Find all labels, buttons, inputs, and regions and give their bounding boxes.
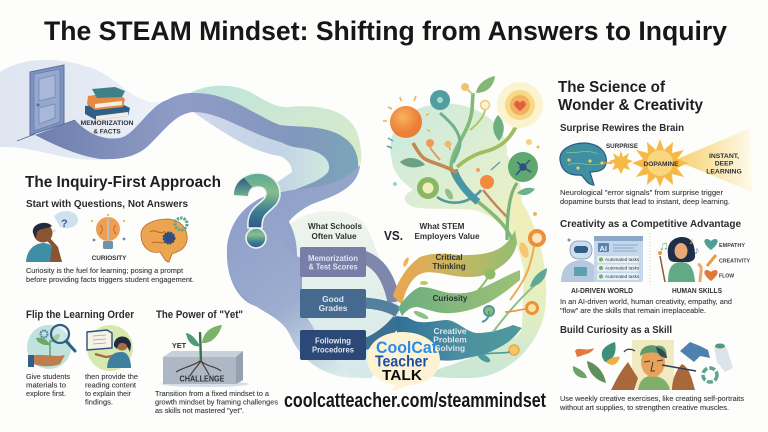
box: following procedures: Procedores bbox=[312, 344, 354, 354]
icon: hand with plant and magnifier bbox=[27, 325, 75, 369]
label: yet: YET bbox=[172, 341, 187, 350]
label: instant deep learning: INSTANT, bbox=[709, 153, 739, 160]
label: curiosity: CURIOSITY bbox=[92, 255, 127, 262]
icon: teacher with open book bbox=[87, 325, 133, 371]
box: good grades bbox=[300, 289, 366, 318]
caption: then provide: reading content bbox=[85, 380, 137, 390]
label: dopamine: DOPAMINE bbox=[644, 161, 679, 168]
question mark icon bbox=[234, 173, 280, 248]
label: creative problem solving: Creative bbox=[433, 326, 467, 336]
logo: coolcat teacher talk: Teacher bbox=[375, 354, 428, 370]
illustration: nature self-portrait collage bbox=[573, 340, 733, 390]
body: transition from fixed mindset bbox=[155, 389, 278, 415]
label: memorization and facts: & FACTS bbox=[93, 128, 121, 136]
brain bbox=[560, 143, 606, 185]
heading: flip the learning order: Flip the Learning Order bbox=[26, 309, 135, 321]
body: ai-driven world: In an AI-driven world, human creativity, empathy, and bbox=[560, 297, 732, 306]
label: empathy: EMPATHY bbox=[719, 243, 745, 249]
caption: give students: Give students bbox=[26, 372, 70, 381]
body: weekly creative exercises: Use weekly creative exercises, like creating self-portraits bbox=[560, 394, 744, 403]
panel: automated tasks: Automated tasks bbox=[605, 274, 640, 279]
school values heading: What Schools bbox=[308, 222, 363, 231]
flows from school values bbox=[360, 256, 398, 345]
open door icon bbox=[17, 65, 75, 141]
tree backdrop bbox=[390, 104, 546, 378]
icon: thinking student: ? bbox=[61, 218, 68, 230]
caption: then provide: then provide the bbox=[85, 372, 138, 381]
icon: brain with gears bbox=[141, 218, 187, 262]
body: error signals: Neurological "error signals" from surprise trigger bbox=[560, 188, 723, 197]
illustration: creative woman with music notes: ♪ bbox=[689, 236, 694, 247]
small burst bbox=[609, 151, 633, 174]
heading: science of wonder and creativity: Wonder & Creativity bbox=[558, 97, 703, 114]
label: creative problem solving: Problem bbox=[433, 334, 467, 344]
label: memorization and facts bbox=[80, 120, 134, 136]
caption: then provide: to explain their bbox=[85, 389, 131, 398]
illustration: creative woman with music notes: ♪ bbox=[694, 245, 700, 257]
caption: give students: explore first. bbox=[26, 389, 66, 398]
illustration: creative woman with music notes: ♫ bbox=[659, 238, 669, 253]
label: creativity: CREATIVITY bbox=[719, 258, 750, 264]
light beam bbox=[675, 128, 752, 192]
question mark blob bbox=[227, 165, 360, 378]
label: curiosity: Curiosity bbox=[433, 294, 468, 303]
heading: science of wonder and creativity bbox=[558, 79, 703, 114]
label: instant deep learning bbox=[706, 153, 742, 176]
leaves and materials bbox=[575, 348, 594, 357]
dopamine burst bbox=[632, 139, 688, 187]
title: The STEAM Mindset: Shifting from Answers to Inquiry bbox=[44, 16, 727, 46]
body: error signals: dopamine bursts that lead to instant, deep learning. bbox=[560, 197, 730, 206]
heading: the power of yet: The Power of "Yet" bbox=[156, 309, 243, 321]
icon: teal heart bbox=[704, 239, 718, 250]
body: weekly creative exercises bbox=[559, 394, 744, 412]
label: critical thinking: Critical bbox=[435, 253, 463, 262]
label: creative problem solving: Solving bbox=[435, 343, 465, 353]
icon: pencil bbox=[707, 255, 716, 266]
box: memorization and test scores: & Test Scores bbox=[308, 262, 358, 272]
icon: stack of books bbox=[85, 87, 130, 120]
tree of curiosity bbox=[383, 76, 543, 240]
illustration: robot bbox=[561, 238, 606, 282]
body: transition from fixed mindset: as skills not mastered "yet". bbox=[155, 406, 244, 415]
school values heading bbox=[308, 222, 363, 241]
employer values heading: Employers Value bbox=[414, 232, 480, 241]
box: memorization and test scores bbox=[300, 247, 366, 277]
panel: automated tasks: AI bbox=[600, 244, 607, 253]
label: memorization and facts: MEMORIZATION bbox=[80, 120, 134, 127]
panel: automated tasks: Automated tasks bbox=[605, 266, 640, 271]
caption: give students: materials to bbox=[26, 380, 66, 390]
body: ai-driven world bbox=[560, 297, 732, 315]
label: instant deep learning: DEEP bbox=[715, 160, 734, 168]
hands bbox=[611, 362, 638, 390]
subheading: surprise rewires the brain: Surprise Rewires the Brain bbox=[560, 123, 684, 134]
heading: science of wonder and creativity: The Science of bbox=[558, 79, 666, 96]
flows to employer values bbox=[393, 230, 547, 364]
caption: then provide: findings. bbox=[85, 398, 113, 406]
legend: human skills bbox=[704, 239, 750, 281]
dotted divider bbox=[649, 233, 651, 285]
box: following procedures bbox=[300, 330, 366, 360]
icon: thinking student bbox=[26, 211, 78, 262]
heading: inquiry-first approach: The Inquiry-First Approach bbox=[25, 174, 221, 191]
label: flow: FLOW bbox=[719, 274, 734, 280]
box: following procedures: Following bbox=[315, 336, 351, 346]
subheading: build curiosity as a skill: Build Curiosity as a Skill bbox=[560, 325, 672, 336]
body: ai-driven world: "flow" are the skills that remain irreplaceable. bbox=[560, 306, 706, 315]
icon: curiosity brain bulb bbox=[91, 214, 125, 249]
logo: coolcat teacher talk: TALK bbox=[382, 367, 422, 384]
portrait bbox=[632, 340, 674, 390]
body: curiosity is the fuel: before providing facts triggers student engagement. bbox=[26, 275, 194, 284]
label: creative problem solving bbox=[433, 326, 467, 353]
body: transition from fixed mindset: growth mindset by framing challenges bbox=[155, 398, 278, 406]
box: good grades: Good bbox=[322, 294, 344, 304]
panel: automated tasks bbox=[594, 236, 643, 282]
body: curiosity is the fuel bbox=[26, 266, 194, 284]
box: memorization and test scores: Memorization bbox=[308, 253, 358, 263]
diagram: surprise to dopamine to learning bbox=[560, 128, 752, 192]
body: transition from fixed mindset: Transition from a fixed mindset to a bbox=[155, 389, 270, 398]
label: instant deep learning: LEARNING bbox=[706, 168, 742, 176]
body: error signals bbox=[560, 188, 730, 206]
winding path from door to question mark bbox=[0, 60, 361, 222]
employer values heading bbox=[414, 222, 480, 241]
school values heading: Often Value bbox=[312, 232, 357, 241]
panel: automated tasks: Automated tasks bbox=[605, 257, 640, 262]
icon: orange heart bbox=[704, 270, 718, 281]
employer values heading: What STEM bbox=[420, 222, 464, 231]
logo: coolcat teacher talk bbox=[367, 332, 440, 391]
label: surprise: SURPRISE bbox=[606, 143, 639, 150]
label: critical thinking: Thinking bbox=[432, 262, 466, 271]
box: good grades: Grades bbox=[319, 303, 348, 313]
url: coolcatteacher.com/steammindset bbox=[284, 390, 546, 412]
illustration: sprout breaking through challenge block bbox=[161, 325, 249, 387]
versus label: VS. bbox=[384, 229, 403, 243]
logo: coolcat teacher talk: CoolCat bbox=[376, 339, 437, 357]
label: human skills: HUMAN SKILLS bbox=[672, 286, 722, 295]
label: challenge: CHALLENGE bbox=[180, 374, 224, 384]
subheading: creativity as a competitive advantage: Creativity as a Competitive Advantage bbox=[560, 219, 741, 230]
body: curiosity is the fuel: Curiosity is the fuel for learning; posing a prompt bbox=[26, 266, 184, 275]
caption: give students bbox=[26, 372, 70, 398]
label: ai-driven world: AI-DRIVEN WORLD bbox=[571, 286, 634, 295]
body: weekly creative exercises: without art supplies, to strengthen creative muscles. bbox=[559, 403, 729, 412]
pale panel behind school values bbox=[282, 211, 400, 378]
label: critical thinking bbox=[432, 253, 466, 271]
caption: then provide bbox=[85, 372, 138, 406]
illustration: creative woman with music notes bbox=[658, 236, 701, 282]
subheading: start with questions: Start with Questions, Not Answers bbox=[26, 199, 188, 210]
